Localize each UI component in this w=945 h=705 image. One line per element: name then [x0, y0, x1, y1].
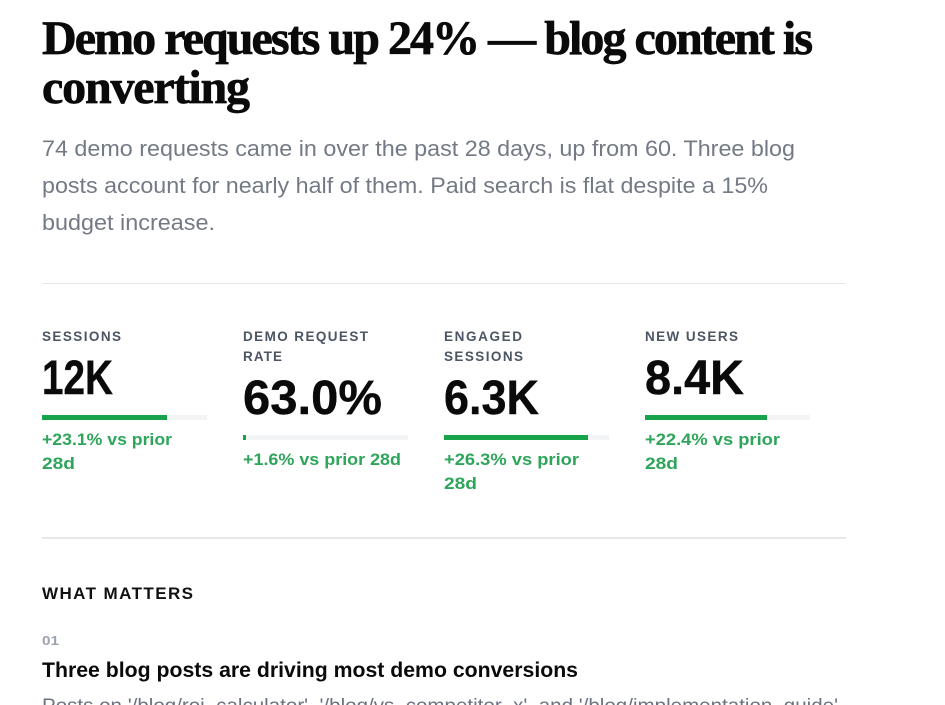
change: engaged sessions [444, 450, 579, 493]
change: new users [645, 430, 780, 473]
subtitle text block: 74 demo requests came in over the past 28 days, up from 60. Three blog [42, 136, 795, 161]
metric label: demo request rate [243, 329, 369, 364]
metric panel: engaged sessions [444, 329, 609, 493]
title: Demo requests up 24% — blog content is [42, 12, 813, 65]
subtitle text block [42, 136, 795, 235]
change: engaged sessions: +26.3% vs prior [444, 450, 579, 469]
progress bar: engaged sessions [444, 435, 609, 440]
change: new users: +22.4% vs prior [645, 430, 780, 449]
change: new users: 28d [645, 454, 678, 473]
title: converting [42, 61, 250, 114]
subtitle text block: posts account for nearly half of them. Paid search is flat despite a 15% [42, 173, 768, 198]
metric value: demo request rate: 63.0% [243, 372, 382, 425]
change: sessions: +23.1% vs prior [42, 430, 172, 449]
progress bar: new users [645, 415, 810, 420]
progress bar: demo request rate [243, 435, 408, 440]
section heading: what matters: WHAT MATTERS [42, 584, 193, 603]
metric label: engaged sessions [444, 329, 523, 364]
item heading: Three blog posts are driving most demo conversions [42, 659, 578, 682]
metric label: demo request rate: RATE [243, 349, 282, 364]
metric label: new users: NEW USERS [645, 329, 738, 344]
title [42, 12, 813, 114]
metric label: sessions: SESSIONS [42, 329, 121, 344]
metric label: demo request rate: DEMO REQUEST [243, 329, 369, 344]
change: sessions [42, 430, 172, 473]
metric label: engaged sessions: ENGAGED [444, 329, 522, 344]
metric panel: new users [645, 329, 810, 473]
progress bar: sessions [42, 415, 207, 420]
subtitle text block: budget increase. [42, 210, 215, 235]
metric value: new users: 8.4K [645, 352, 744, 405]
metric panel: demo request rate [243, 329, 408, 469]
item number: 01 [42, 633, 59, 648]
metric value: sessions: 12K [42, 352, 113, 405]
metric label: engaged sessions: SESSIONS [444, 349, 523, 364]
metric value: engaged sessions: 6.3K [444, 372, 539, 425]
change: sessions: 28d [42, 454, 75, 473]
change: demo request rate: +1.6% vs prior 28d [243, 450, 401, 469]
metric panel: sessions [42, 329, 207, 473]
change: engaged sessions: 28d [444, 474, 477, 493]
